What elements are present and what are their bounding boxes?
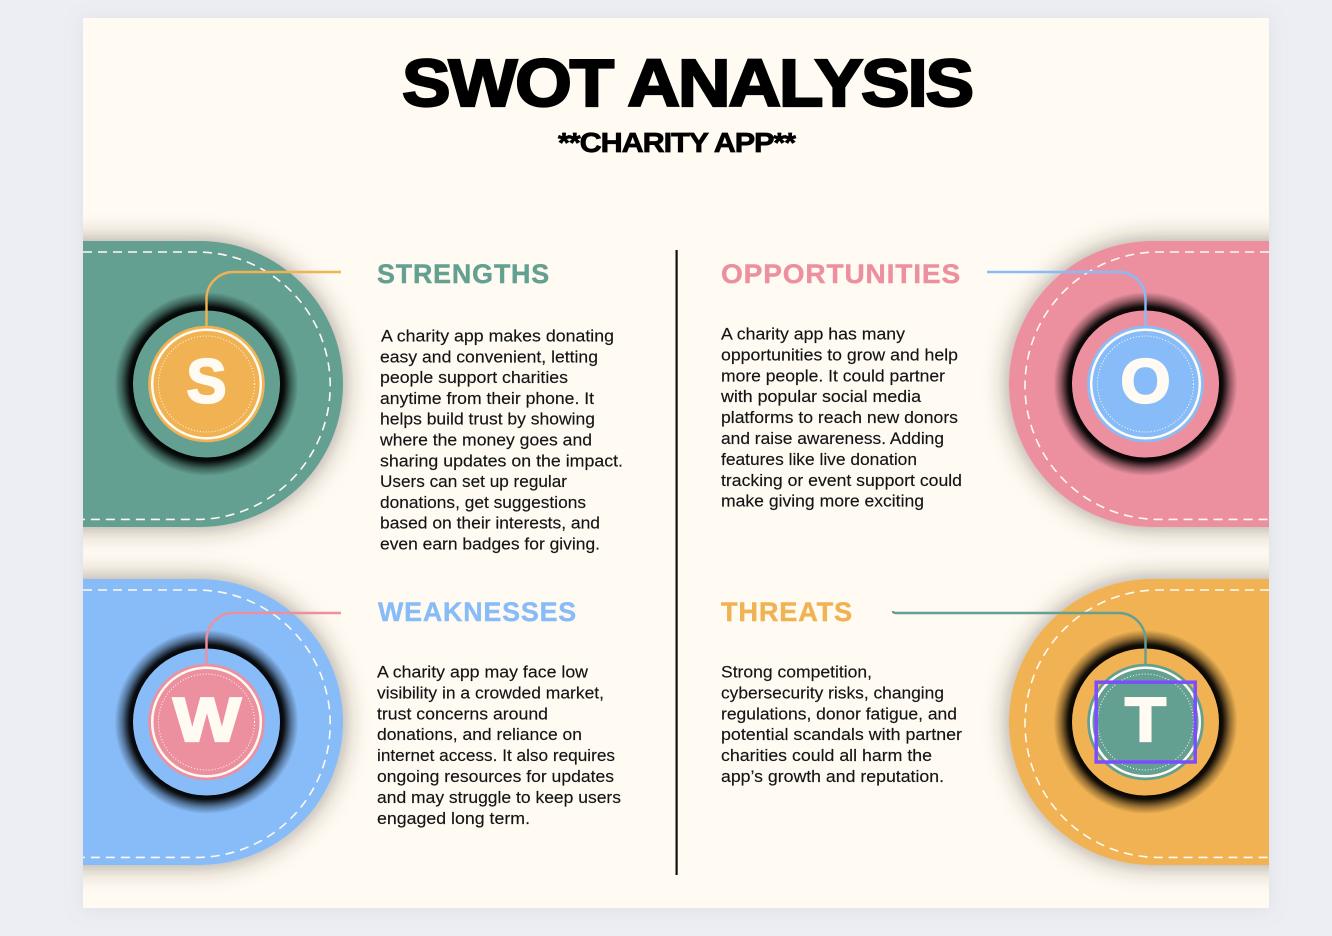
text block: threats: regulations, donor fatigue, and (721, 705, 957, 723)
text block: threats: charities could all harm the (721, 747, 932, 765)
panel: strengths badge (60, 241, 343, 527)
text block: opportunities: A charity app has many (721, 326, 906, 344)
inner disc: weaknesses (133, 648, 280, 796)
letter O: O (1120, 348, 1170, 416)
text block: threats: potential scandals with partner (721, 726, 963, 744)
dark glow: threats (1054, 630, 1238, 814)
dashed stitching: strengths (83, 252, 330, 519)
text block: strengths: sharing updates on the impact. (380, 452, 623, 470)
text block: strengths: based on their interests, and (380, 515, 600, 533)
letter T: T (1125, 686, 1166, 755)
text block: strengths: anytime from their phone. It (380, 390, 594, 408)
tab shape: threats (1009, 579, 1292, 865)
dark glow: strengths (114, 292, 298, 476)
coin: opportunities (1087, 326, 1204, 442)
connector line: opportunities (987, 272, 1146, 328)
coin: weaknesses (148, 664, 265, 780)
text block: weaknesses: donations, and reliance on (377, 726, 582, 744)
text block: strengths: people support charities (380, 369, 568, 387)
inner disc: opportunities (1072, 310, 1219, 458)
text block: threats: Strong competition, (721, 664, 872, 682)
text block: weaknesses: trust concerns around (377, 705, 548, 723)
text block: strengths: even earn badges for giving. (380, 536, 600, 554)
text block: weaknesses: internet access. It also requires (377, 747, 615, 765)
coin: threats (1087, 664, 1204, 780)
inner disc: threats (1072, 648, 1219, 796)
text block: opportunities: platforms to reach new donors (721, 409, 958, 427)
tab shape: strengths (60, 241, 343, 527)
letter S: S (186, 348, 226, 416)
text block: strengths (379, 328, 623, 554)
text block: strengths: donations, get suggestions (380, 494, 586, 512)
dark glow: opportunities (1054, 292, 1238, 476)
center divider (676, 250, 678, 875)
heading: threats: THREATS (721, 597, 853, 627)
text block: threats: app’s growth and reputation. (721, 768, 944, 786)
heading: weaknesses: WEAKNESSES (378, 597, 577, 627)
subtitle: **CHARITY APP** (558, 127, 796, 158)
text block: weaknesses: and may struggle to keep users (377, 789, 621, 807)
text block: weaknesses: ongoing resources for updates (377, 768, 614, 786)
panel: opportunities badge (987, 241, 1292, 527)
dashed stitching: weaknesses (83, 590, 330, 857)
text block: weaknesses: visibility in a crowded market, (377, 684, 604, 702)
dashed stitching: opportunities (1025, 252, 1269, 519)
text block: threats (721, 664, 963, 786)
text block: opportunities: make giving more exciting (721, 493, 924, 511)
panel: threats badge (893, 579, 1292, 865)
text block: strengths: Users can set up regular (380, 473, 568, 491)
text block: opportunities (720, 326, 962, 511)
text block: weaknesses (377, 664, 621, 828)
text block: opportunities: and raise awareness. Adding (721, 430, 944, 448)
heading: opportunities: OPPORTUNITIES (721, 259, 961, 289)
text block: strengths: helps build trust by showing (380, 411, 595, 429)
tab shape: opportunities (1009, 241, 1292, 527)
text block: threats: cybersecurity risks, changing (721, 684, 944, 702)
title: SWOT ANALYSIS (402, 46, 972, 121)
panel: weaknesses badge (60, 579, 343, 865)
heading: strengths: STRENGTHS (377, 259, 550, 289)
dark glow: weaknesses (114, 630, 298, 814)
letter W: W (173, 686, 242, 755)
coin: strengths (148, 326, 265, 442)
text block: opportunities: features like live donation (721, 451, 917, 469)
text block: weaknesses: A charity app may face low (377, 664, 588, 682)
text block: opportunities: opportunities to grow and help (721, 346, 958, 364)
connector line: strengths (206, 272, 341, 328)
tab shape: weaknesses (60, 579, 343, 865)
text block: strengths: where the money goes and (379, 432, 592, 450)
text block: weaknesses: engaged long term. (377, 810, 530, 828)
dashed stitching: threats (1025, 590, 1269, 857)
selection box around T (1096, 682, 1195, 762)
text block: opportunities: more people. It could partner (721, 367, 946, 385)
connector line: weaknesses (206, 613, 341, 666)
text block: opportunities: with popular social media (720, 388, 922, 406)
connector line: threats (893, 611, 1146, 664)
text block: strengths: A charity app makes donating (381, 328, 614, 346)
text block: opportunities: tracking or event support could (721, 472, 962, 490)
inner disc: strengths (133, 310, 280, 458)
text block: strengths: easy and convenient, letting (380, 348, 598, 366)
